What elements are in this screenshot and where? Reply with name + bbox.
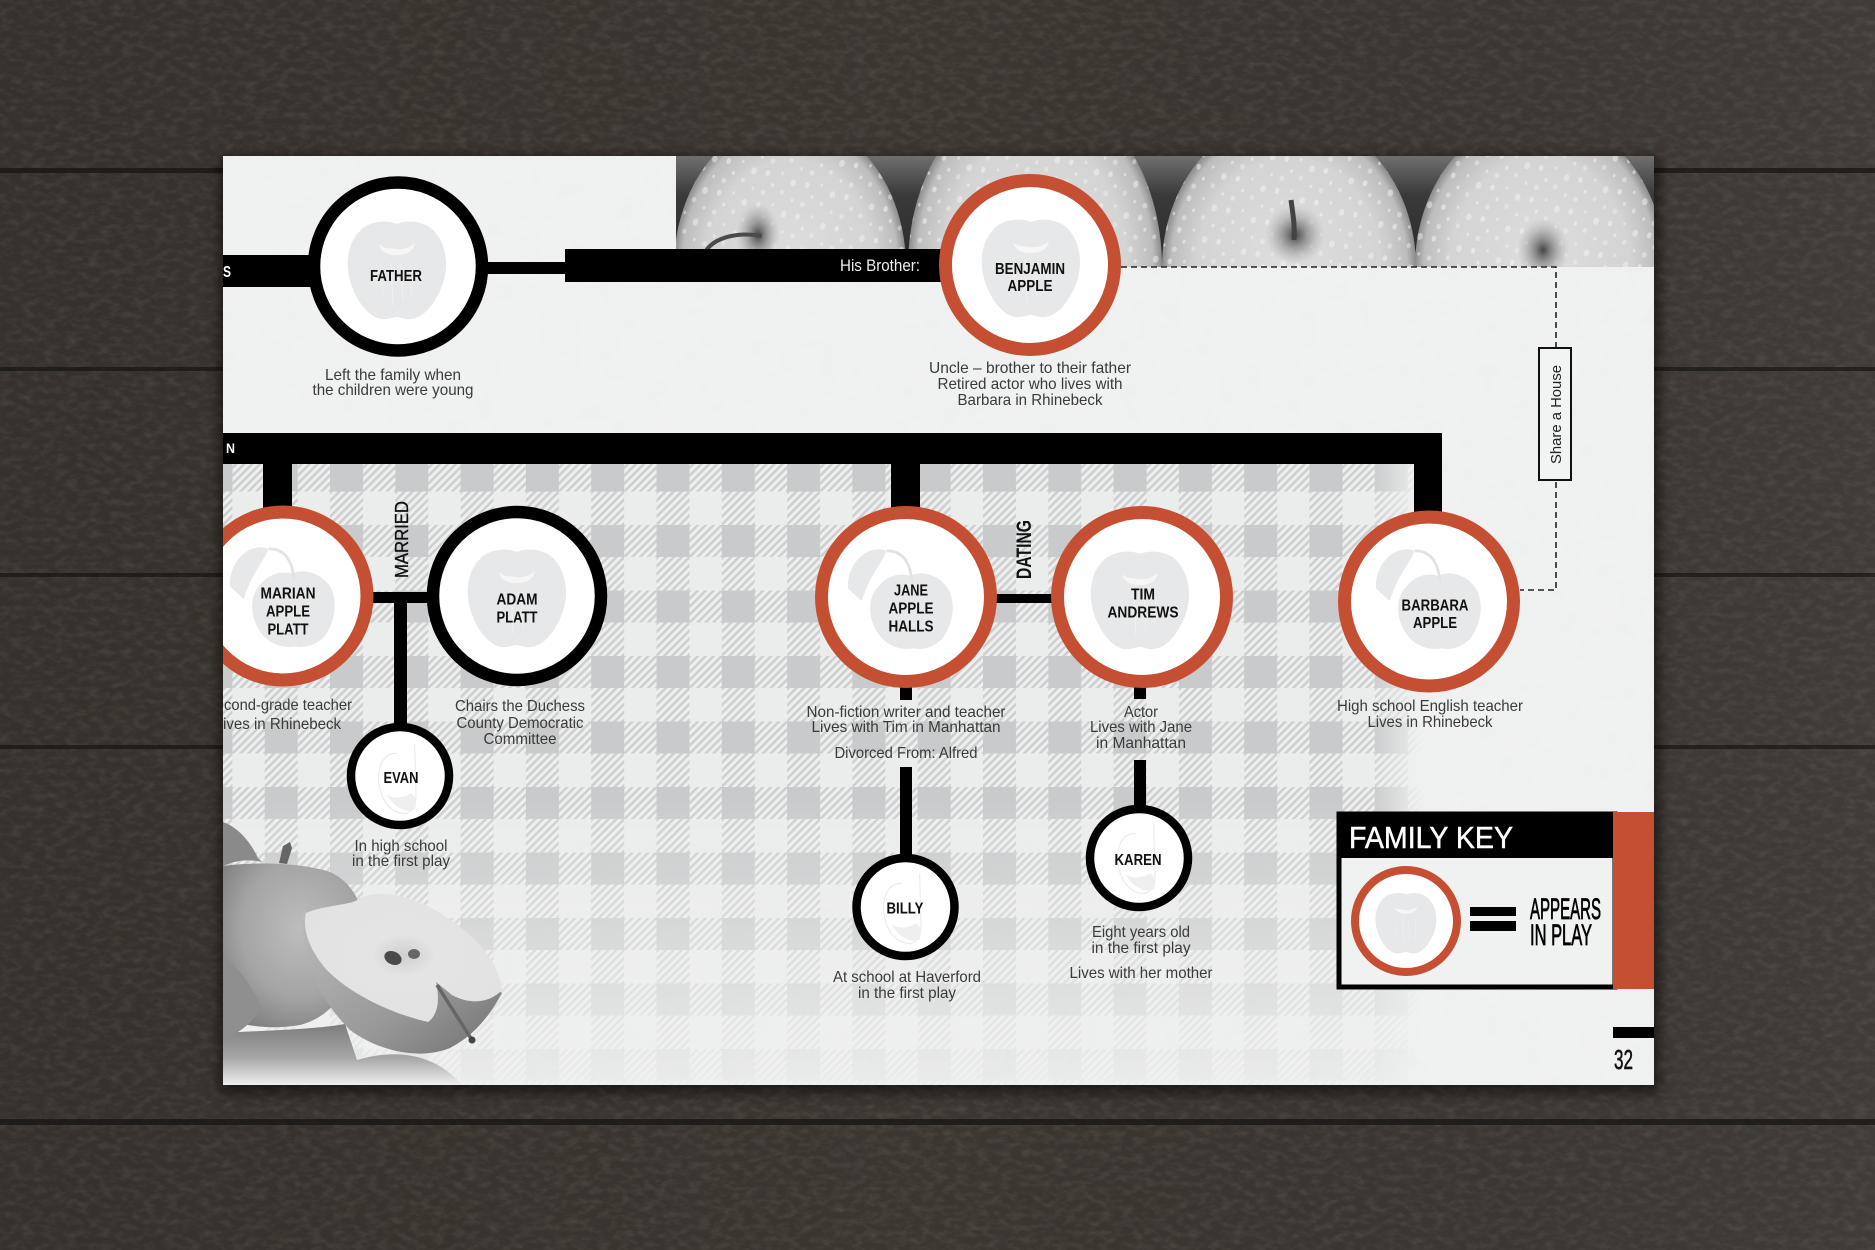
caption: Karen [1070,924,1213,982]
node: Marian Apple Platt: MARIAN [260,586,316,602]
node: Benjamin Apple [946,180,1114,350]
share a house tag: Share a House [1548,365,1565,464]
panel: family key [1337,812,1654,989]
caption: Tim: Actor [1124,704,1159,721]
key text: IN PLAY [1530,919,1592,952]
caption: Marian: cond-grade teacher [224,697,353,714]
caption: Billy: in the first play [858,985,956,1002]
icon: equals sign [1470,907,1516,931]
caption: Jane [806,704,1006,762]
caption: Karen: Eight years old [1092,924,1190,941]
node: Barbara Apple [1344,517,1514,686]
photo strip: apples with water drops [676,156,1654,267]
caption: Marian: ives in Rhinebeck [223,716,342,733]
gingham tablecloth pattern [223,460,1463,1090]
connector: dashed line between Benjamin and Barbara [1121,267,1556,590]
caption: Tim: Lives with Jane [1090,719,1192,736]
connector: father to brother [485,262,567,274]
caption: Barbara: Lives in Rhinebeck [1368,714,1493,731]
bar: his brother [565,249,945,282]
node: Tim Andrews: TIM [1131,586,1155,604]
node: Barbara Apple: BARBARA [1402,598,1468,614]
caption: Karen: Lives with her mother [1070,965,1213,982]
bar: children generation line: N [226,440,235,456]
caption: Tim: in Manhattan [1096,735,1186,752]
caption: Evan [352,838,450,870]
page number: 32 [1614,1044,1633,1075]
node: Jane Apple Halls: HALLS [888,618,934,636]
caption: Benjamin Apple: Barbara in Rhinebeck [958,392,1103,409]
share a house tag [1539,348,1571,480]
caption: Father: Left the family when [325,367,461,384]
caption: Barbara: High school English teacher [1337,698,1524,715]
connector: married link [373,592,428,724]
caption: Adam [455,698,585,748]
node: Adam Platt: ADAM [496,592,538,608]
node: Marian Apple Platt: APPLE [266,604,310,620]
connectors: children lines [900,686,1146,859]
page number [1613,1027,1654,1075]
caption: Jane: Divorced From: Alfred [834,745,978,762]
node: Billy [856,858,954,956]
caption: Jane: Lives with Tim in Manhattan [812,719,1000,736]
key header: FAMILY KEY [1349,820,1513,855]
node: Tim Andrews: ANDREWS [1108,604,1178,622]
connector: dating link [995,594,1053,603]
node: Father: FATHER [370,268,422,285]
caption: Billy [833,969,981,1002]
node: Evan [351,727,449,825]
key header [1337,812,1613,858]
key text: APPEARS [1530,893,1601,926]
node: Benjamin Apple: APPLE [1008,278,1052,295]
caption: Father: the children were young [312,382,474,399]
caption: Barbara [1337,698,1524,731]
label: married: MARRIED [392,501,412,578]
bar: father's generation line [223,255,313,287]
bar: his brother: His Brother: [840,256,920,275]
key red side band [1613,812,1654,989]
node: Marian Apple Platt [199,512,367,680]
node: Adam Platt: PLATT [496,610,538,626]
icon: apple in red ring [1355,870,1457,972]
label: dating: DATING [1013,520,1036,579]
caption: Tim [1090,704,1192,752]
node: Karen: KAREN [1114,852,1162,869]
node: Adam Platt [433,512,601,680]
bar: children generation line [223,433,1442,518]
caption: Marian [223,697,353,733]
caption: Evan: In high school [354,838,448,855]
caption: Karen: in the first play [1092,940,1190,957]
bar: father's generation line: S [223,264,231,281]
paper page [199,90,1665,1090]
caption: Evan: in the first play [352,853,450,870]
caption: Adam: Chairs the Duchess [455,698,585,715]
key text [1530,893,1601,952]
node: Billy: BILLY [886,900,924,918]
caption: Billy: At school at Haverford [833,969,981,986]
node: Jane Apple Halls: APPLE [888,600,934,618]
node: Barbara Apple: APPLE [1413,615,1457,632]
node: Jane Apple Halls [822,512,990,682]
caption: Jane: Non-fiction writer and teacher [806,704,1006,721]
caption: Father [312,367,474,399]
node: Tim Andrews [1058,512,1226,682]
caption: Benjamin Apple: Uncle – brother to their father [929,360,1132,377]
caption: Benjamin Apple [930,362,1131,405]
node: Benjamin Apple: BENJAMIN [995,261,1065,278]
node: Marian Apple Platt: PLATT [268,622,309,638]
photo: apples and halved apple [223,822,502,1085]
caption: Adam: County Democratic [456,715,584,732]
node: Father [314,182,482,350]
node: Jane Apple Halls: JANE [894,582,928,600]
node: Karen [1090,809,1188,907]
caption: Benjamin Apple: Retired actor who lives with [938,376,1122,393]
caption: Adam: Committee [484,731,557,748]
paper shadow [219,156,1660,1094]
node: Evan: EVAN [384,770,418,787]
